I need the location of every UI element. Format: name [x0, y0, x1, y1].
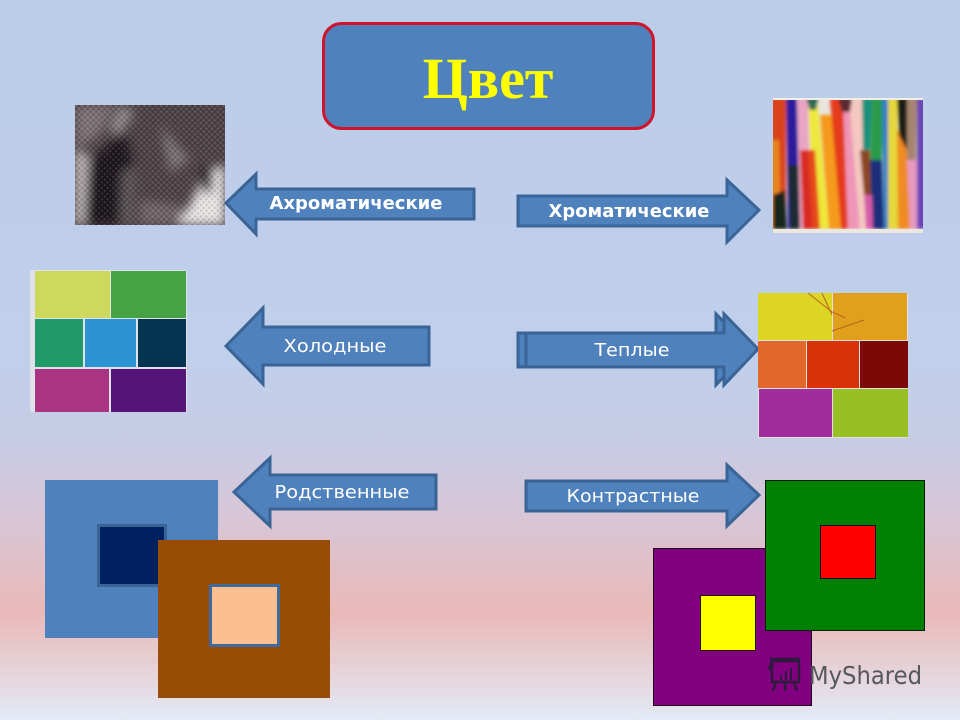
arrow: Контрастные: Контрастные	[566, 486, 700, 507]
swatches: cold colours	[30, 270, 187, 412]
arrow: Холодные	[226, 308, 429, 384]
arrow: Ахроматические: Ахроматические	[270, 193, 442, 214]
arrow: Родственные: Родственные	[274, 482, 410, 503]
arrow: Ахроматические	[226, 174, 474, 234]
arrow: Хроматические	[518, 180, 759, 242]
arrow: Теплые: Теплые	[593, 340, 670, 361]
contrast colours: purple square	[654, 548, 812, 706]
photo: chromatic threads	[770, 98, 926, 233]
arrow: Родственные	[234, 458, 436, 526]
contrast colours: green square	[766, 480, 924, 630]
watermark: MyShared	[769, 659, 922, 691]
photo: achromatic fabric	[75, 105, 225, 225]
watermark: MyShared: MyShared	[809, 661, 922, 690]
arrow: Теплые	[518, 314, 758, 385]
arrow: Хроматические: Хроматические	[548, 201, 710, 222]
title: Цвет	[423, 46, 553, 111]
related colours: blue square	[45, 480, 218, 638]
related colours: brown square	[158, 540, 330, 698]
title	[324, 24, 654, 128]
arrow: Контрастные	[526, 465, 759, 526]
arrow: Холодные: Холодные	[284, 336, 386, 357]
swatches: warm colours	[758, 293, 908, 438]
